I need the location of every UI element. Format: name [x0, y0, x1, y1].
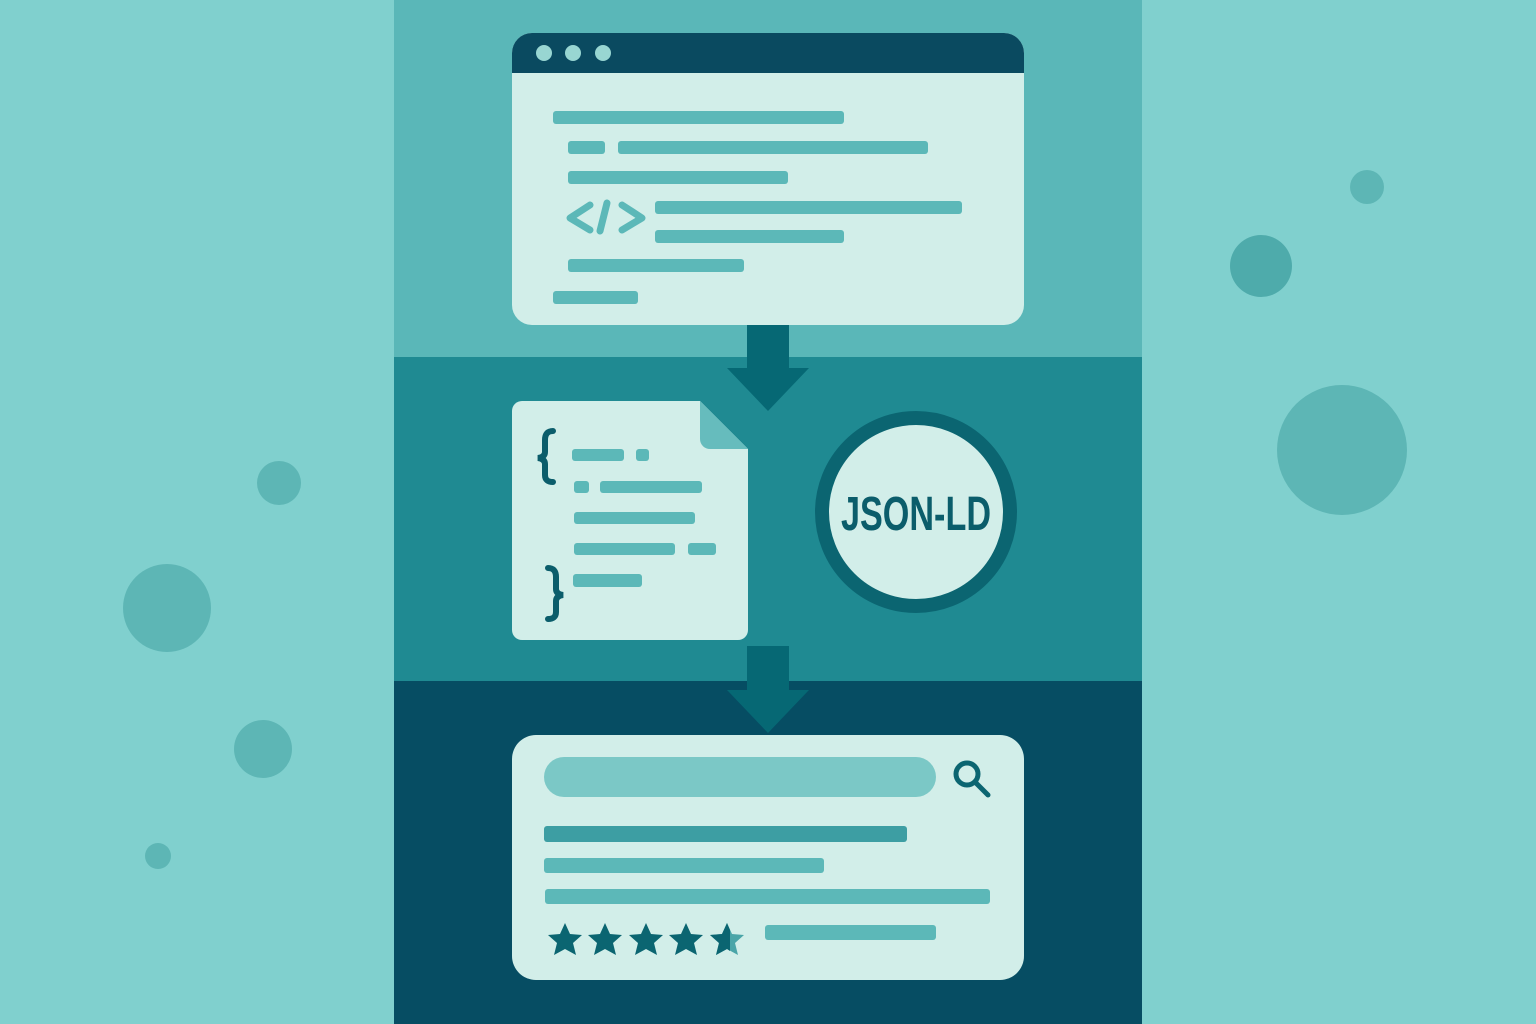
rating stars	[548, 923, 744, 955]
arrow 1	[727, 325, 809, 411]
search result card	[512, 735, 1024, 980]
JSON document	[512, 401, 748, 640]
JSON-LD badge: JSON-LD	[841, 488, 991, 541]
browser window	[512, 33, 1024, 325]
arrow 2	[727, 646, 809, 733]
band: bottom	[394, 681, 1142, 1024]
JSON-LD badge	[822, 418, 1010, 606]
band: middle	[394, 357, 1142, 681]
icon: magnifier	[956, 763, 988, 795]
decorative circles: right	[1230, 170, 1407, 515]
icon: code brackets	[570, 203, 642, 231]
band: top	[394, 0, 1142, 357]
icon: curly braces	[538, 431, 563, 619]
decorative circles: left	[123, 461, 301, 869]
